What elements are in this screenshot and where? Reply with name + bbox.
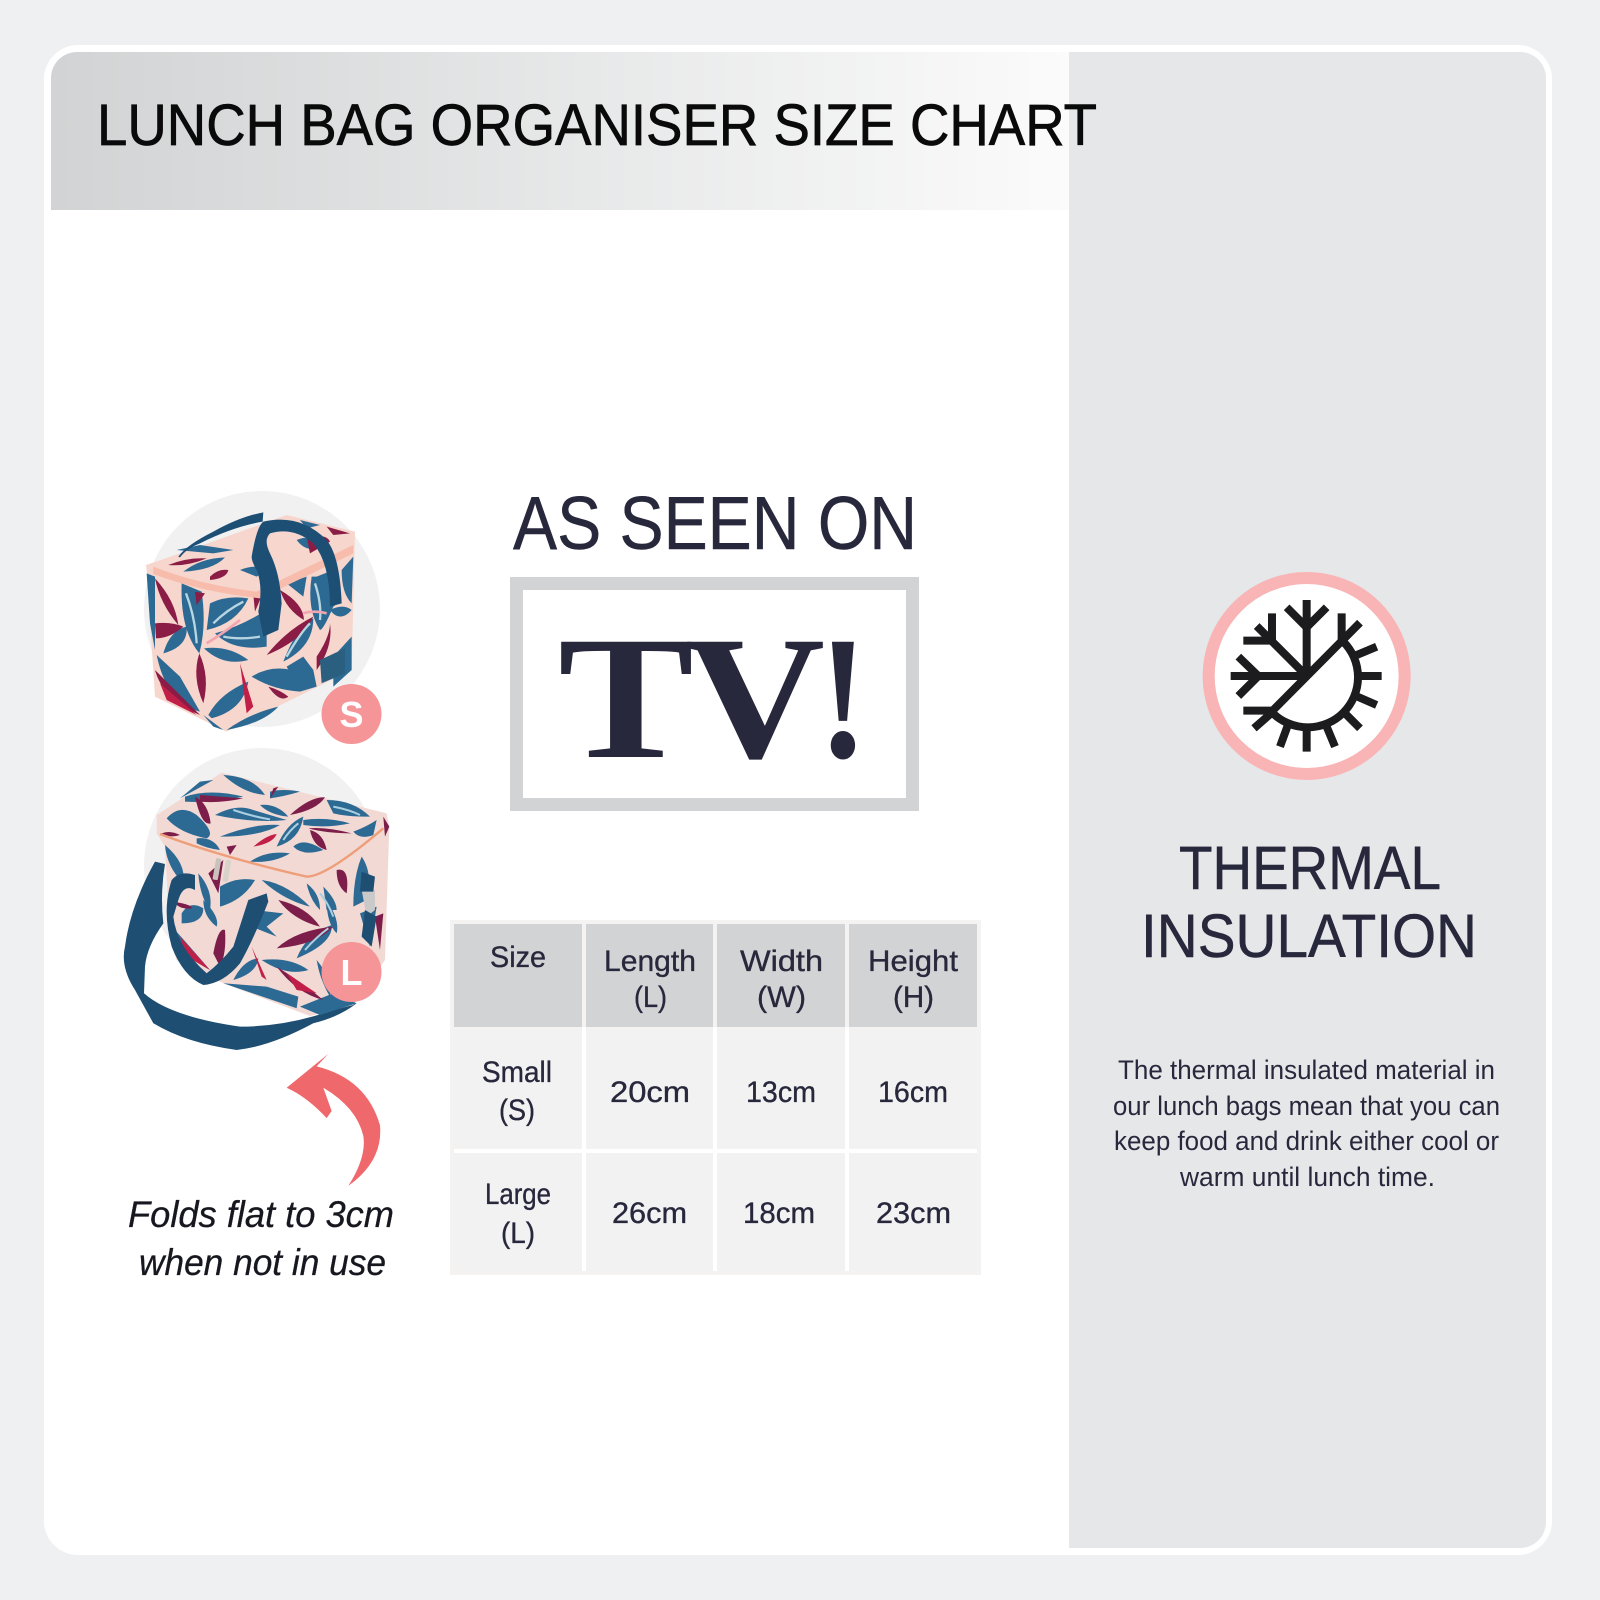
caption: folds flat: [128, 1194, 394, 1283]
size badge: S: S: [339, 694, 364, 735]
size table: [450, 920, 981, 1275]
large bag illustration: [124, 748, 389, 1050]
tv badge: V: [685, 601, 825, 796]
caption: folds flat: when not in use: [139, 1242, 386, 1283]
table header text: (L): [634, 981, 667, 1014]
backdrop circle: large bag: [144, 748, 380, 984]
table row: small: [482, 1056, 948, 1127]
small bag illustration: [144, 491, 382, 744]
heading: thermal insulation: INSULATION: [1141, 902, 1477, 970]
table header text: (H): [893, 981, 934, 1014]
backdrop circle: small bag: [144, 491, 380, 727]
table header text: Width: [740, 945, 823, 978]
heading: thermal insulation: [1141, 834, 1477, 970]
text block: thermal description: our lunch bags mean that you can: [1113, 1091, 1500, 1121]
table row: large: 23cm: [876, 1197, 951, 1230]
text block: thermal description: keep food and drink either cool or: [1114, 1126, 1499, 1156]
panel: thermal side background: [1069, 52, 1546, 1548]
table row: small: 13cm: [746, 1076, 816, 1109]
table row: small: 20cm: [610, 1076, 690, 1109]
title: LUNCH BAG ORGANISER SIZE CHART: [97, 93, 1097, 158]
text block: thermal description: The thermal insulated material in: [1118, 1055, 1495, 1085]
table header text: [490, 941, 959, 1014]
bag: large: [124, 773, 389, 1050]
table row: small: (S): [499, 1094, 535, 1127]
table row: small: Small: [482, 1056, 552, 1089]
heading: as seen on: AS SEEN ON: [513, 481, 917, 565]
bag: small: [146, 512, 355, 732]
text block: thermal description: [1113, 1055, 1500, 1192]
table header text: Height: [868, 945, 959, 978]
table row: small: 16cm: [878, 1076, 948, 1109]
table row: large: (L): [501, 1217, 535, 1250]
table row: large: [485, 1178, 951, 1250]
size badge: L: [322, 942, 382, 1002]
size badge: L: L: [340, 952, 362, 993]
arrow: curved pointer to bag: [287, 1054, 380, 1186]
table row: large: Large: [485, 1178, 551, 1211]
size badge: S: [322, 684, 382, 744]
table header text: Length: [604, 945, 696, 978]
table row: large: 26cm: [612, 1197, 687, 1230]
caption: folds flat: Folds flat to 3cm: [128, 1194, 394, 1235]
tv badge: [516, 584, 912, 804]
icon: thermal snowflake and sun: [1209, 578, 1405, 774]
tv badge: T: [558, 601, 694, 796]
heading: thermal insulation: THERMAL: [1179, 834, 1441, 902]
tv badge: !: [818, 601, 868, 796]
header band: [51, 52, 1069, 210]
table header text: Size: [490, 941, 546, 974]
text block: thermal description: warm until lunch time.: [1179, 1162, 1435, 1192]
table header text: (W): [757, 981, 806, 1014]
table row: large: 18cm: [743, 1197, 815, 1230]
